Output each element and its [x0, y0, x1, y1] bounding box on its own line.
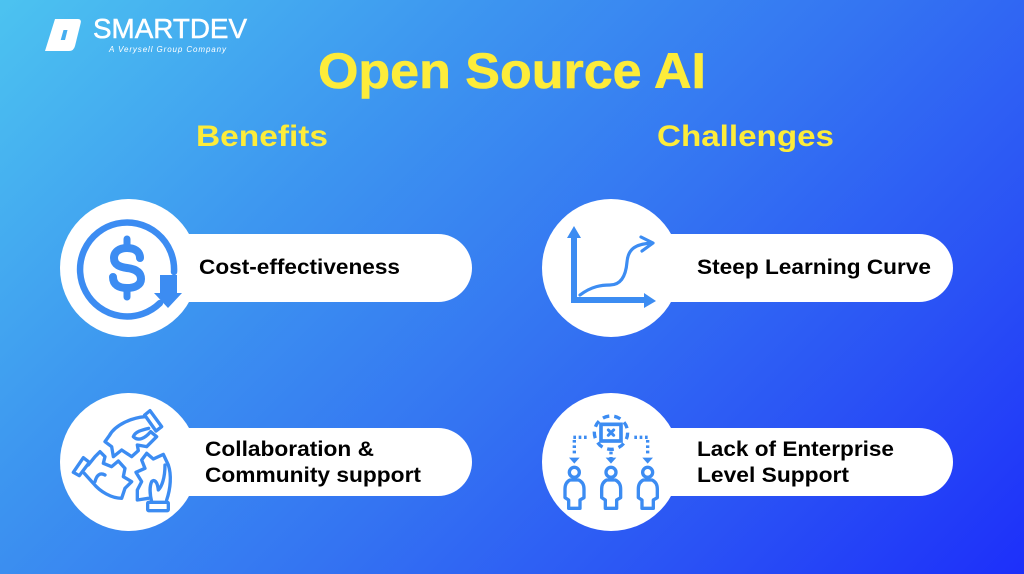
panel: steep learning curve — [542, 199, 953, 337]
circle — [60, 199, 198, 337]
pill — [611, 234, 953, 302]
icon: hands with puzzle pieces — [73, 411, 170, 511]
circle — [542, 199, 680, 337]
icon: learning curve chart — [567, 226, 656, 308]
label — [205, 438, 421, 487]
label: Collaboration & — [205, 438, 374, 461]
logo mark notch — [61, 30, 68, 40]
panel: cost-effectiveness — [60, 199, 472, 337]
title: Open Source AI — [318, 43, 706, 99]
label: Lack of Enterprise — [697, 438, 894, 461]
person 2 — [602, 467, 621, 508]
heading: challenges: Challenges — [657, 120, 834, 153]
pill — [611, 428, 953, 496]
circle — [542, 393, 680, 531]
icon: people with support box — [565, 416, 657, 508]
logo: SmartDev — [45, 13, 247, 54]
circle — [60, 393, 198, 531]
person 1 — [565, 467, 584, 508]
logo mark — [45, 19, 81, 51]
panel: lack of enterprise support — [542, 393, 953, 531]
logo tagline: A Verysell Group Company — [108, 45, 227, 54]
icon: dollar with down arrow — [80, 222, 182, 316]
label: Steep Learning Curve — [697, 256, 931, 279]
label: Community support — [205, 464, 421, 487]
label — [697, 438, 894, 487]
label: Cost-effectiveness — [199, 256, 400, 279]
heading: benefits: Benefits — [196, 120, 328, 153]
pill — [129, 234, 472, 302]
panel: collaboration — [60, 393, 472, 531]
label: Level Support — [697, 464, 849, 487]
person 3 — [638, 467, 657, 508]
pill — [129, 428, 472, 496]
logo wordmark: SMARTDEV — [93, 13, 247, 44]
